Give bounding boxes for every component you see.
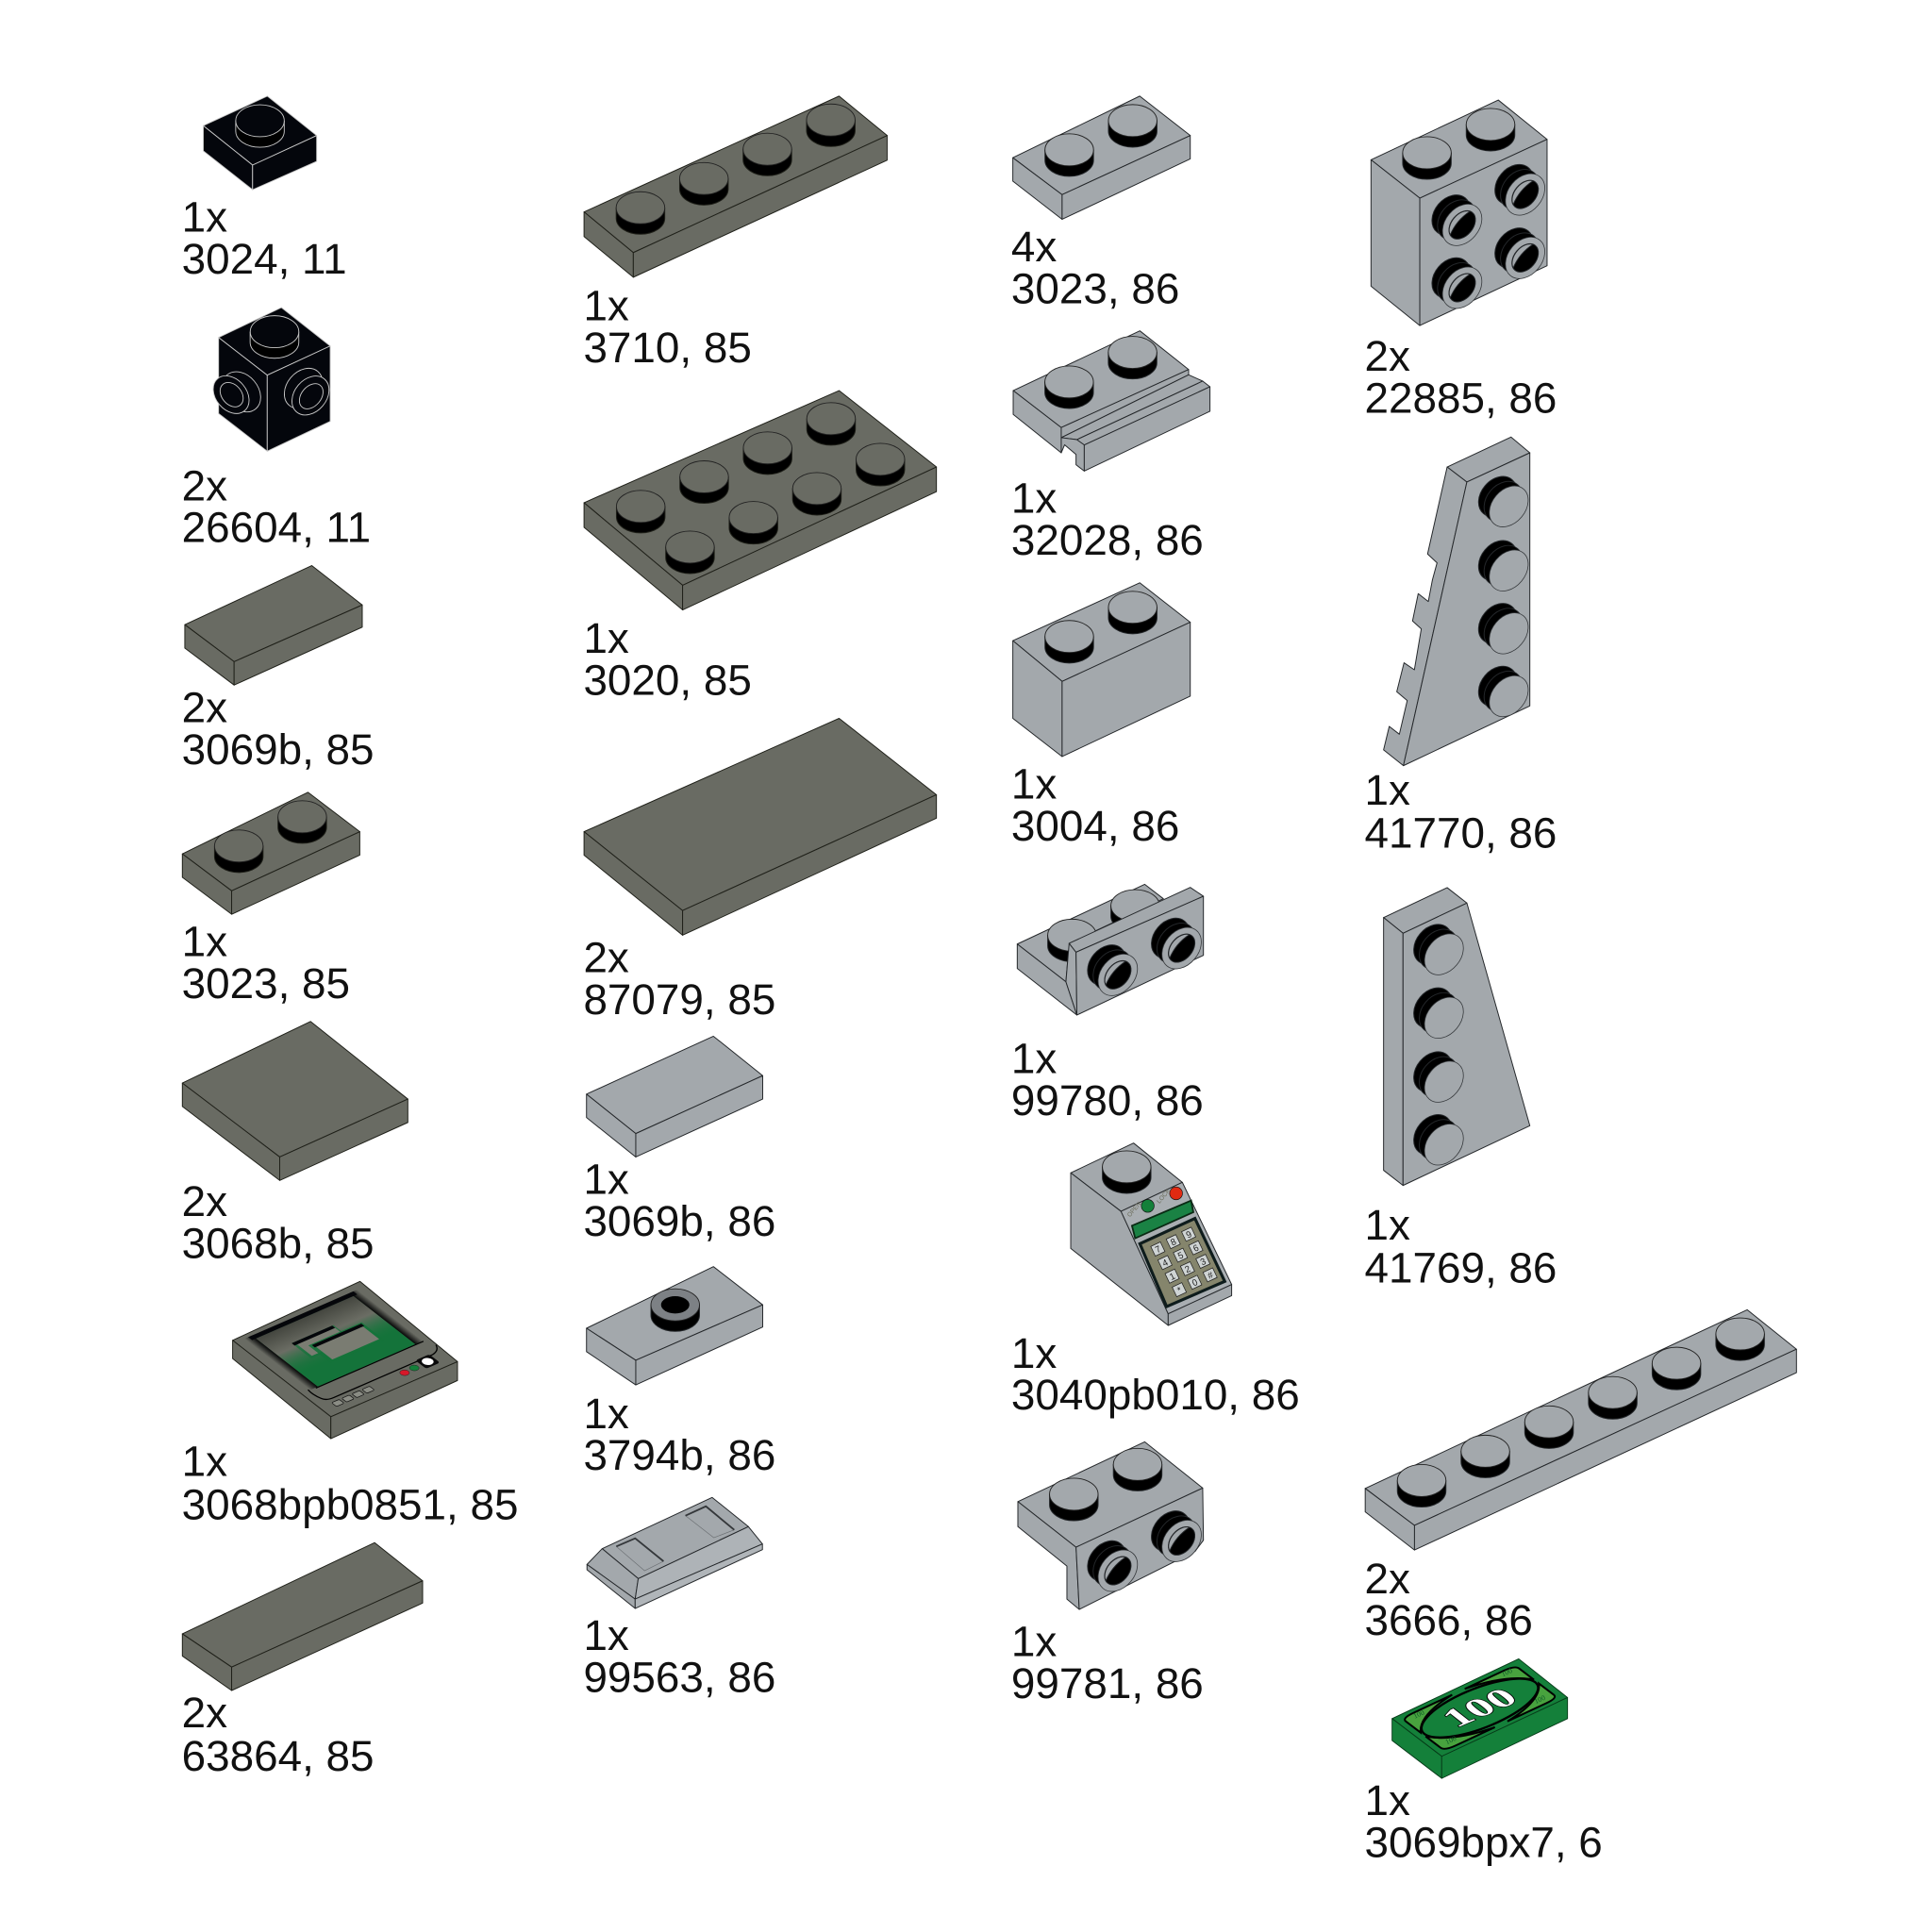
icon: dark tile 2x2	[182, 1022, 408, 1180]
label: 1x	[1011, 474, 1057, 522]
label: 1x	[583, 1156, 629, 1204]
icon: printed computer screen tile	[233, 1281, 458, 1439]
label	[583, 282, 752, 372]
print: keypad: #	[1206, 1270, 1216, 1282]
label	[182, 193, 347, 283]
print: keypad: 8	[1169, 1237, 1178, 1248]
icon: dark tile 1x2	[185, 566, 362, 685]
icon: dark plate 1x2	[182, 792, 359, 914]
label: 41770, 86	[1365, 809, 1557, 858]
part entry: 22885, 86	[1365, 100, 1557, 423]
print: keypad: 2	[1184, 1264, 1192, 1275]
part entry: 99781, 86	[1011, 1441, 1209, 1707]
label: 1x	[182, 918, 227, 966]
icon: dark plate 2x4	[584, 391, 937, 610]
print: keypad: 3	[1199, 1257, 1208, 1268]
label: 2x	[182, 461, 227, 509]
label: 2x	[1365, 332, 1410, 380]
print: lights: LOCK	[1156, 1188, 1173, 1205]
label: 3020, 85	[583, 657, 752, 705]
label: 1x	[182, 1438, 227, 1486]
label: 1x	[1365, 766, 1410, 814]
part entry: 3024, 11	[182, 96, 347, 283]
label: 1x	[1365, 1776, 1410, 1824]
label	[182, 1689, 375, 1780]
label: 3004, 86	[1011, 802, 1179, 850]
icon: light jumper plate	[587, 1267, 762, 1385]
label: 26604, 11	[182, 504, 371, 552]
label: 3068bpb0851, 85	[182, 1480, 518, 1528]
part entry: 32028, 86	[1011, 331, 1210, 564]
print: lights	[1126, 1187, 1182, 1219]
part entry: 87079, 85	[583, 718, 937, 1024]
label: 2x	[182, 1689, 227, 1737]
label: 32028, 86	[1011, 516, 1204, 564]
label	[1011, 223, 1179, 312]
icon: light inverted bracket	[1017, 884, 1209, 1015]
part entry: 3710, 85	[583, 96, 887, 372]
label: 1x	[1365, 1201, 1410, 1249]
print: keypad: 5	[1176, 1250, 1186, 1262]
icon: light plate with door rail	[1013, 331, 1210, 471]
icon: green banknote tile: 100	[1444, 1734, 1457, 1746]
icon: light tile 1x2	[587, 1036, 762, 1157]
label: 3023, 85	[182, 959, 350, 1008]
label: 1x	[1011, 1329, 1057, 1377]
print: keypad: 1	[1168, 1272, 1177, 1283]
label	[1365, 766, 1557, 858]
label: 3024, 11	[182, 235, 347, 283]
part entry: 3069b, 85	[182, 566, 375, 774]
icon: light plate 1x2	[1013, 96, 1191, 219]
print: keypad	[1140, 1219, 1224, 1307]
label: 1x	[1011, 1035, 1057, 1083]
print: keypad: 4	[1161, 1257, 1171, 1270]
label: 3023, 86	[1011, 264, 1179, 312]
label	[1365, 1776, 1603, 1866]
part entry: 99780, 86	[1011, 884, 1209, 1124]
label: 3069b, 85	[182, 725, 375, 774]
label: 3068b, 85	[182, 1220, 375, 1268]
label: 3040pb010, 86	[1011, 1371, 1300, 1419]
part entry: 3794b, 86	[583, 1267, 775, 1479]
print: keypad: 9	[1185, 1229, 1193, 1241]
icon: green banknote tile: 100	[1434, 1683, 1526, 1733]
label: 3794b, 86	[583, 1431, 775, 1479]
part entry: 3020, 85	[583, 391, 937, 705]
label	[583, 614, 752, 705]
label: 1x	[583, 614, 629, 662]
part entry: 3004, 86	[1011, 583, 1191, 850]
print: keypad: 7	[1154, 1244, 1163, 1256]
label	[182, 461, 371, 552]
part entry: 3068b, 85	[182, 1022, 408, 1268]
label	[583, 1390, 775, 1479]
print: keypad: 0	[1191, 1277, 1200, 1289]
label	[1365, 1555, 1533, 1644]
icon: green banknote tile: 100	[1533, 1693, 1547, 1706]
icon: dark plate 1x4	[584, 96, 887, 277]
part entry: 3023, 85	[182, 792, 359, 1008]
label	[1365, 1201, 1557, 1292]
icon: black plate 1x1	[204, 96, 317, 190]
part entry: 3666, 86	[1365, 1309, 1796, 1644]
label: 1x	[583, 282, 629, 330]
part entry: 3069b, 86	[583, 1036, 775, 1245]
print: lights: OPEN	[1126, 1201, 1143, 1219]
label: 99780, 86	[1011, 1076, 1204, 1124]
label	[583, 1156, 775, 1245]
label	[182, 1177, 375, 1268]
label: 2x	[583, 934, 629, 982]
icon: light brick 1x2	[1013, 583, 1191, 757]
label	[182, 1438, 518, 1528]
label: 22885, 86	[1365, 375, 1557, 423]
label: 1x	[1011, 759, 1057, 808]
print: keypad: 6	[1191, 1242, 1201, 1255]
label: 1x	[583, 1611, 629, 1659]
label: 3069b, 86	[583, 1197, 775, 1245]
label	[1011, 1035, 1204, 1124]
icon: dark tile 2x4	[584, 718, 937, 935]
icon: green banknote tile: 100	[1412, 1708, 1425, 1721]
part entry: 63864, 85	[182, 1542, 423, 1780]
label	[182, 683, 375, 774]
label: 99781, 86	[1011, 1659, 1204, 1707]
label	[1011, 1329, 1300, 1419]
part entry: 41769, 86	[1365, 888, 1557, 1292]
icon: light brick with four side studs	[1371, 100, 1553, 325]
label: 4x	[1011, 223, 1057, 271]
part entry: 3069bpx7, 6	[1365, 1658, 1603, 1866]
label: 1x	[182, 193, 227, 242]
label: 63864, 85	[182, 1732, 375, 1780]
label: 1x	[583, 1390, 629, 1438]
label: 2x	[182, 1177, 227, 1225]
part entry: 41770, 86	[1365, 437, 1557, 858]
icon: slope with printed keypad	[1071, 1143, 1232, 1325]
label: 2x	[182, 683, 227, 731]
part entry: 99563, 86	[583, 1497, 775, 1701]
label	[1011, 474, 1204, 564]
print: keypad: *	[1175, 1285, 1184, 1296]
part entry: 3023, 86	[1011, 96, 1191, 312]
icon: light wedge plate, left	[1384, 437, 1536, 766]
label	[1365, 332, 1557, 423]
label: 2x	[1365, 1555, 1410, 1603]
label	[1011, 1617, 1204, 1707]
label	[1011, 759, 1179, 850]
label: 99563, 86	[583, 1653, 775, 1701]
label: 1x	[1011, 1617, 1057, 1665]
part entry: 26604, 11	[182, 308, 371, 552]
print: green status bar	[1132, 1201, 1193, 1239]
icon: green banknote tile	[1392, 1658, 1568, 1778]
label	[583, 934, 775, 1024]
label	[182, 918, 350, 1008]
icon: dark tile 1x3	[182, 1542, 423, 1690]
icon: light plate 1x6	[1365, 1309, 1796, 1550]
icon: light bracket	[1018, 1441, 1209, 1609]
icon: black brick with side studs	[206, 308, 337, 451]
icon: green banknote tile: 100	[1500, 1666, 1514, 1678]
icon: light ingot	[587, 1497, 762, 1608]
icon: light wedge plate, right	[1384, 888, 1530, 1186]
label	[583, 1611, 775, 1701]
label: 3069bpx7, 6	[1365, 1818, 1603, 1866]
label: 3710, 85	[583, 324, 752, 372]
label: 3666, 86	[1365, 1596, 1533, 1644]
label: 87079, 85	[583, 975, 775, 1024]
part entry: 3040pb010, 86	[1011, 1143, 1300, 1419]
label: 41769, 86	[1365, 1244, 1557, 1292]
part entry: 3068bpb0851, 85	[182, 1281, 518, 1528]
